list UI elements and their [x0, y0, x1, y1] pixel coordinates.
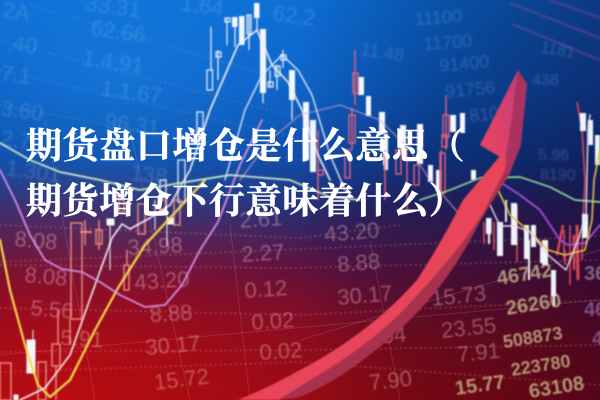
lower red price numbers: 2.27 — [241, 239, 285, 267]
line: pale green average left — [0, 143, 360, 200]
yellow volume numbers: 223780 — [509, 351, 572, 380]
faint blue price numbers: 138 — [129, 160, 169, 189]
top-right pink streaks — [510, 0, 600, 60]
line: pale average — [225, 55, 345, 190]
lower red price numbers: 0.12 — [244, 275, 288, 303]
faint blue price numbers: 11.48 — [359, 39, 406, 65]
faint blue price numbers: 7.1 — [0, 60, 33, 89]
faint blue price numbers: 62.2 — [271, 0, 317, 31]
vertical grid lines — [0, 120, 600, 400]
arrow shaft shadow band — [278, 170, 510, 400]
faint blue price numbers — [0, 0, 576, 189]
faint blue price numbers: 5.96 — [538, 147, 569, 164]
lower red price numbers: 43.20 — [323, 217, 380, 247]
arrow shaft and neck — [238, 156, 510, 400]
lower red price numbers: 15.73 — [430, 280, 487, 311]
lower red price numbers: 8.08 — [24, 262, 68, 291]
arrow head — [480, 70, 518, 157]
faint blue price numbers: 11100 — [414, 6, 463, 29]
faint blue price numbers: 8190 — [540, 167, 576, 184]
lower red price numbers: 8.08 — [14, 226, 58, 255]
yellow volume numbers: 46742 — [495, 260, 554, 290]
arrow head shaded fold — [505, 70, 527, 173]
faint blue price numbers: 8100 — [468, 102, 510, 126]
faint blue price numbers: 91756 — [444, 77, 496, 102]
lower red price numbers: 30.17 — [144, 330, 201, 360]
faint blue price numbers: 91400 — [438, 51, 490, 76]
lower red price numbers: 0.02 — [259, 337, 303, 365]
candlestick chart: red centre-right candles — [318, 50, 449, 210]
faint blue price numbers: 1181 — [539, 39, 576, 62]
faint blue price numbers: 1.4.91 — [81, 45, 145, 78]
candlestick chart: top centre and left — [160, 3, 476, 210]
line: white average right — [490, 115, 590, 270]
faint blue price numbers: 438 — [532, 72, 559, 89]
lower red price numbers: 7.90 — [368, 366, 413, 395]
title line two: 期货增仓下行意味着什么） — [26, 180, 465, 221]
lower red price numbers: 15.72 — [153, 363, 210, 395]
lower red price numbers: 7.91 — [456, 338, 501, 367]
lower red price numbers: 34.98 — [127, 232, 183, 260]
lower red price numbers — [14, 205, 501, 395]
yellow volume numbers: 15.77 — [454, 371, 506, 400]
line: yellow average — [0, 180, 205, 397]
faint blue price numbers: 2.79 — [0, 125, 45, 156]
candlestick chart: far right — [484, 102, 600, 306]
yellow volume numbers: 508873 — [501, 323, 564, 352]
lower red price numbers: 5.54 — [362, 321, 407, 350]
lower red price numbers: 5.56 — [30, 295, 74, 324]
line: green average right — [420, 177, 600, 202]
yellow volume numbers: 26260 — [504, 290, 563, 320]
line: orange average right — [498, 150, 600, 255]
lower red price numbers: 2.61 — [239, 205, 283, 233]
yellow volume numbers — [454, 260, 586, 400]
lower red price numbers: 43.20 — [134, 266, 190, 295]
line: right violet average — [500, 182, 600, 245]
title — [26, 125, 465, 221]
candlestick chart: lower left — [0, 200, 180, 400]
lower red price numbers: 8.88 — [149, 300, 193, 327]
faint blue price numbers: 11700 — [423, 31, 473, 54]
rising red arrow — [238, 70, 527, 400]
faint blue price numbers: .40 — [5, 30, 39, 59]
line: purple average — [0, 120, 262, 307]
faint blue price numbers: 62.66 — [89, 15, 147, 48]
lower red price numbers: 8.88 — [336, 248, 381, 277]
lower red price numbers: 30.17 — [336, 280, 393, 310]
faint blue price numbers: 1.1.67 — [99, 75, 163, 108]
faint blue price numbers: 1.301 — [4, 155, 62, 188]
lower red price numbers: 5.91 — [60, 325, 104, 352]
title line one: 期货盘口增仓是什么意思（ — [26, 125, 465, 166]
violet right-edge numbers — [584, 263, 600, 350]
faint blue price numbers: 3.60 — [0, 95, 45, 126]
lower red price numbers: 23.55 — [440, 312, 497, 343]
lower red price numbers: 0.02 — [251, 307, 295, 335]
line: white average — [20, 30, 330, 400]
faint blue price numbers: 96.31 — [103, 108, 161, 141]
line: pale rising average — [240, 105, 460, 215]
